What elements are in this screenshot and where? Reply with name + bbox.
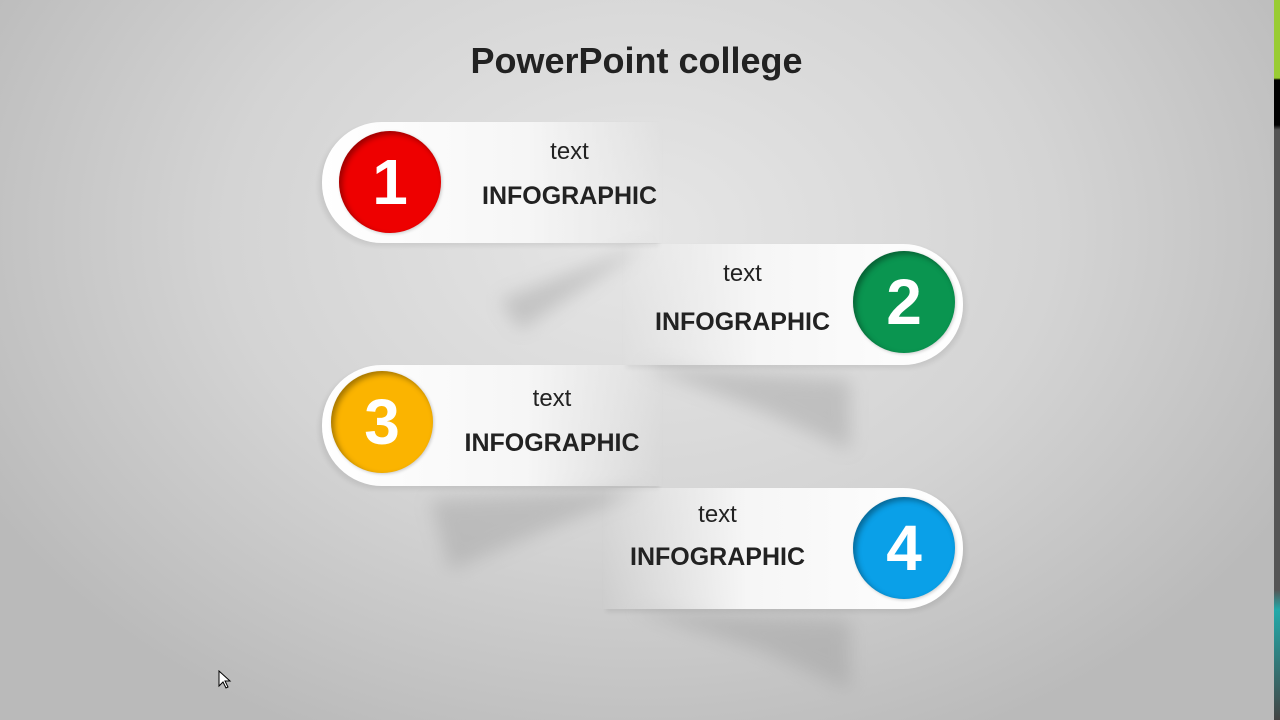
text 4: text bbox=[698, 501, 737, 528]
text 1: INFOGRAPHIC bbox=[482, 182, 657, 210]
text 2: text bbox=[723, 260, 762, 287]
text 3: INFOGRAPHIC bbox=[464, 429, 640, 457]
circle 3: 3 bbox=[364, 386, 400, 458]
text 2 bbox=[655, 260, 830, 336]
text 1: text bbox=[550, 138, 589, 165]
right edge strip bbox=[1274, 0, 1280, 720]
banner 3 bbox=[322, 365, 662, 486]
circle 4: 4 bbox=[886, 512, 922, 584]
text 2: INFOGRAPHIC bbox=[655, 308, 830, 336]
text 3 bbox=[464, 385, 640, 457]
banner 1 bbox=[322, 122, 662, 243]
circle 2 bbox=[853, 251, 955, 353]
banner 4 bbox=[603, 488, 963, 609]
text 4: INFOGRAPHIC bbox=[630, 543, 805, 571]
circle 1: 1 bbox=[372, 146, 408, 218]
circle 2: 2 bbox=[886, 266, 922, 338]
banner 2 bbox=[623, 244, 963, 365]
circle 4 bbox=[853, 497, 955, 599]
icon: cursor bbox=[218, 670, 232, 689]
circle 3 bbox=[331, 371, 433, 473]
text 4 bbox=[630, 501, 805, 571]
text 3: text bbox=[533, 385, 571, 412]
text 1 bbox=[482, 138, 657, 210]
circle 1 bbox=[339, 131, 441, 233]
title: PowerPoint college bbox=[470, 40, 803, 81]
